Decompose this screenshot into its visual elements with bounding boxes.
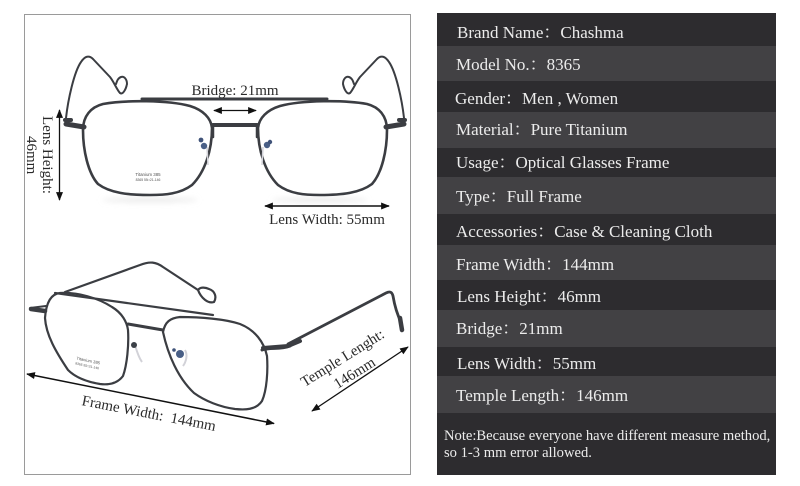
spec: bridge: Bridge：21mm xyxy=(456,319,563,338)
lens imprint: 8365 55□21-146 xyxy=(75,361,100,370)
note: so 1-3 mm error allowed. xyxy=(444,445,592,461)
spec: usage: Usage：Optical Glasses Frame xyxy=(456,153,669,172)
arrow: frame width xyxy=(27,374,274,424)
spec: lens width: Lens Width：55mm xyxy=(457,354,596,373)
panel: specification table xyxy=(437,13,776,475)
spec: gender: Gender：Men , Women xyxy=(455,89,619,108)
lens imprint: Titanium 385 xyxy=(76,356,101,366)
panel: glasses measurement diagrams xyxy=(23,14,410,474)
label: temple length value: 146mm xyxy=(331,355,379,393)
lens imprint: Titanium 385 xyxy=(135,172,161,177)
label: frame width: Frame Width: 144mm xyxy=(80,393,217,435)
spec: type: Type：Full Frame xyxy=(456,187,582,206)
note: Note:Because everyone have different measure method, xyxy=(444,428,770,444)
label: lens height: Lens Height: xyxy=(39,116,55,194)
front view glasses xyxy=(65,57,405,202)
spec: brand name: Brand Name：Chashma xyxy=(457,23,624,42)
spec: material: Material：Pure Titanium xyxy=(456,120,627,139)
lens imprint xyxy=(135,172,161,182)
spec: lens height: Lens Height：46mm xyxy=(457,287,601,306)
label: lens height value: 46mm xyxy=(23,136,39,175)
note xyxy=(444,428,770,461)
spec: temple length: Temple Length：146mm xyxy=(456,386,628,405)
arrow: lens height xyxy=(58,110,60,200)
lens imprint: 8365 55□21-146 xyxy=(136,178,161,182)
spec: accessories: Accessories：Case & Cleaning Cloth xyxy=(456,222,713,241)
label: temple length: Temple Lenght: xyxy=(298,327,387,391)
label: bridge: Bridge: 21mm xyxy=(191,83,279,99)
arrow: temple length xyxy=(312,347,408,411)
arrow: bridge xyxy=(214,110,256,112)
arrow: lens width xyxy=(265,205,389,207)
lens imprint xyxy=(75,356,101,371)
spec: frame width: Frame Width：144mm xyxy=(456,255,614,274)
label: lens width: Lens Width: 55mm xyxy=(269,212,385,228)
angled view glasses xyxy=(30,263,402,409)
spec: model number: Model No.：8365 xyxy=(456,55,581,74)
